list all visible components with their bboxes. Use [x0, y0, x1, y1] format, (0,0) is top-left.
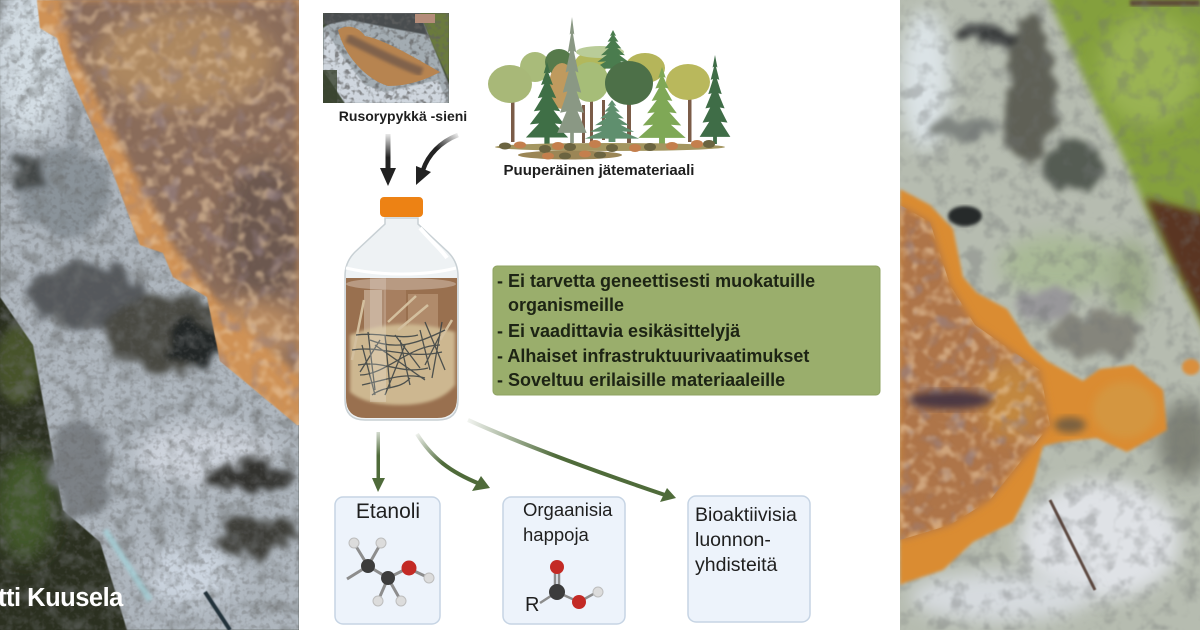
leaf litter: [495, 140, 725, 160]
heading: bioactive compounds: luonnon-: [695, 529, 771, 551]
mycelium threads: [352, 322, 445, 395]
benefits list text: - Ei tarvetta geneettisesti muokatuille: [497, 271, 815, 291]
arrow: fungus to bottle: [380, 134, 396, 186]
heading: bioactive compounds: yhdisteitä: [695, 554, 778, 576]
liquid: [346, 278, 457, 418]
right photo: bark, moss and fungus: [900, 0, 1200, 630]
benefits list text: - Alhaiset infrastruktuurivaatimukset: [497, 346, 809, 366]
trunks: [511, 95, 692, 143]
benefits list text: organismeille: [508, 295, 624, 315]
conifers: [526, 62, 568, 144]
arrow: wood waste to bottle: [416, 135, 458, 185]
fungus on left photo: [30, 0, 305, 430]
photo: fungus on bark: [323, 13, 449, 103]
panel: ethanol: [335, 497, 440, 624]
heading: organic acids: Orgaanisia: [523, 499, 613, 520]
centre white panel: [299, 0, 900, 630]
heading: ethanol: Etanoli: [356, 500, 420, 523]
back trees: [520, 30, 665, 83]
glass body: [345, 218, 458, 420]
panel: organic acids: [503, 497, 625, 624]
heading: bioactive compounds: [695, 504, 797, 576]
icon: forest: [488, 17, 730, 160]
panel: bioactive compounds: [688, 496, 810, 622]
benefits list text: - Ei vaadittavia esikäsittelyjä: [497, 321, 741, 341]
arrow: bottle to ethanol: [372, 432, 385, 492]
left photo: birch bark with fungus: [0, 0, 305, 630]
label: fungus: Rusorypykkä -sieni: [339, 108, 467, 124]
label: wood waste: Puuperäinen jätemateriaali: [504, 162, 694, 179]
heading: organic acids: [523, 499, 613, 545]
benefits list text: - Soveltuu erilaisille materiaaleille: [497, 370, 785, 390]
heading: organic acids: happoja: [523, 524, 590, 545]
shoulder highlight: [420, 228, 447, 258]
icon: culture bottle: [345, 197, 458, 420]
benefits list text: [497, 271, 815, 390]
round crowns: [488, 65, 532, 103]
panel: benefits: [493, 266, 880, 395]
photo credit: tti Kuusela: [0, 584, 124, 612]
cap: [380, 197, 423, 217]
arrow: bottle to bioactive compounds: [468, 420, 676, 502]
icon: carboxylic acid molecule: R: [525, 594, 539, 616]
moss background: [1045, 0, 1200, 340]
fungus on right photo: [900, 189, 1167, 585]
heading: bioactive compounds: Bioaktiivisia: [695, 504, 797, 526]
icon: ethanol molecule: [347, 538, 434, 606]
arrow: bottle to organic acids: [417, 434, 490, 491]
